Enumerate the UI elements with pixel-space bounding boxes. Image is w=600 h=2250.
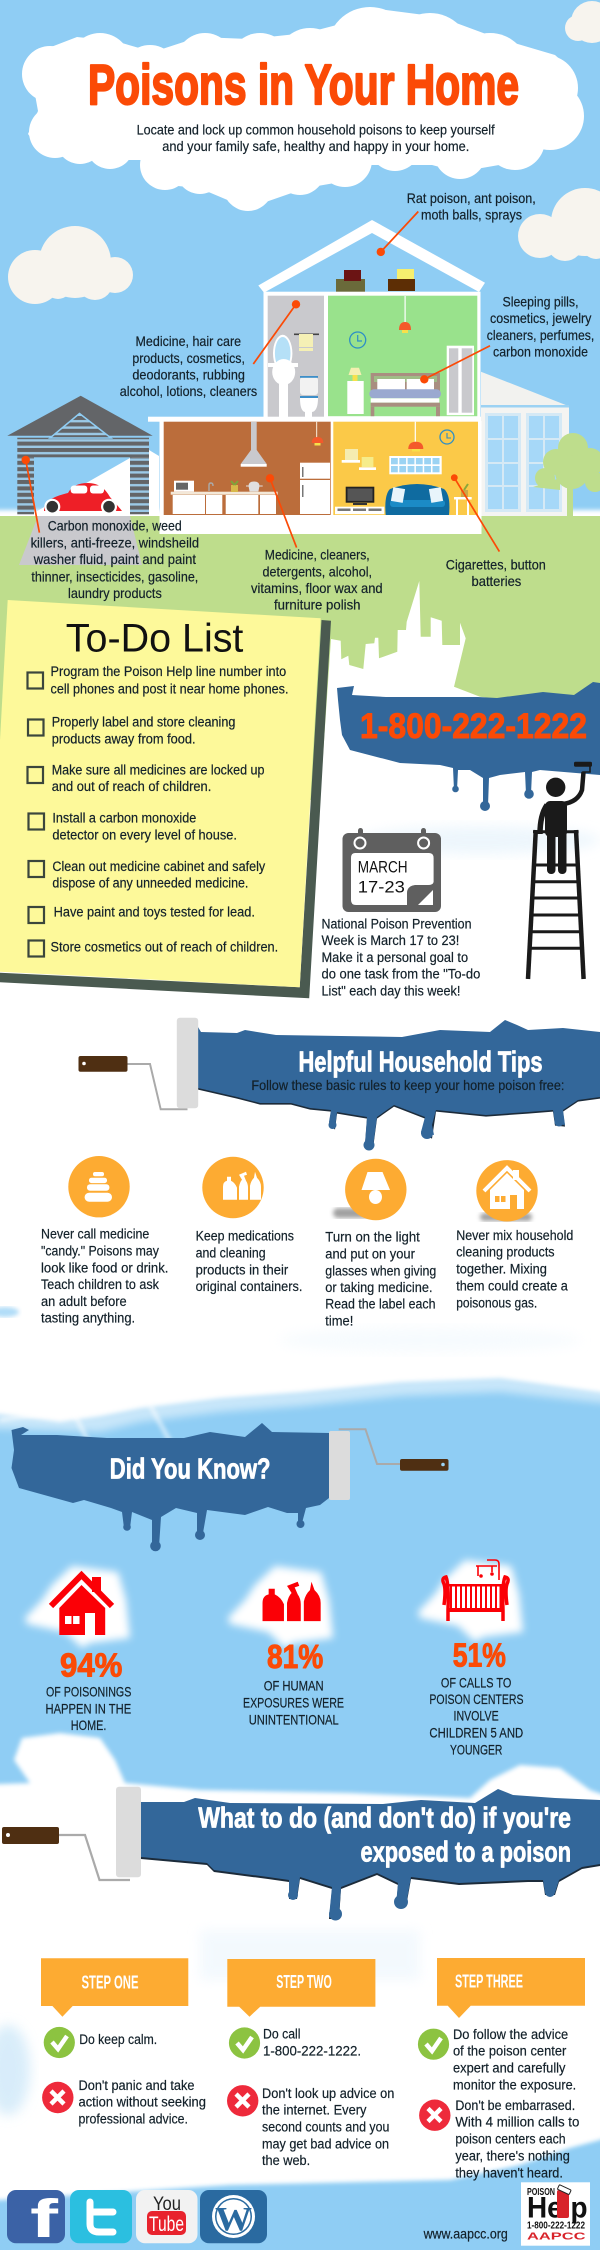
stat: 51%: POISON CENTERS: [429, 1691, 524, 1707]
callout: kitchen: [251, 546, 383, 613]
house cross-section: [148, 220, 485, 534]
callout: attic: moth balls, sprays: [421, 206, 522, 222]
step one column: Do keep calm.: [79, 2032, 157, 2047]
stat: 81%: 81%: [267, 1638, 323, 1675]
panel: to-do list note: [0, 600, 331, 998]
callout: bathroom: alcohol, lotions, cleaners: [120, 383, 257, 399]
callout: garage: washer fluid, paint and paint: [33, 551, 196, 567]
icon: calendar: MARCH: [358, 858, 408, 877]
stat: 51%: YOUNGER: [450, 1741, 502, 1757]
clouds: small decorative clouds: [8, 1, 600, 304]
tip 3 text: Turn on the light: [325, 1230, 420, 1245]
callout: garage: [31, 518, 199, 601]
callout lines and dots: [22, 212, 499, 552]
to-do items: detector on every level of house.: [52, 827, 237, 842]
step three column: STEP THREE: [455, 1972, 523, 1992]
tip icon: bottles: [202, 1157, 264, 1218]
tip 3 text: glasses when giving: [325, 1263, 436, 1278]
callout: garage: laundry products: [68, 585, 162, 601]
icon: facebook: f: [30, 2189, 60, 2249]
step header: [227, 1959, 375, 2017]
logo: poison help: Help: [527, 2191, 588, 2224]
to-do items: products away from food.: [52, 731, 196, 746]
icon: red crib: [443, 1560, 508, 1621]
to-do items: cell phones and post it near home phones.: [50, 681, 288, 696]
stat: 51%: 51%: [453, 1637, 506, 1674]
paint banner: helpful household tips: [198, 1020, 600, 1150]
checkboxes: [28, 672, 44, 956]
bedroom: [328, 296, 477, 416]
to-do items: and out of reach of children.: [52, 779, 211, 794]
stat: 94%: OF POISONINGS: [46, 1684, 131, 1700]
icon: calendar: [342, 828, 441, 912]
driveway: [19, 516, 142, 565]
stat: 94%: 94%: [60, 1647, 122, 1684]
attic boxes: [336, 269, 415, 292]
callout: bathroom: Medicine, hair care: [136, 333, 241, 349]
paint banner: what to do: [141, 1789, 600, 1920]
text: national poison prevention week: Week is March 17 to 23!: [322, 933, 459, 948]
callout: attic: Rat poison, ant poison,: [407, 190, 536, 206]
stat: 94%: HOME.: [71, 1717, 106, 1733]
step header: [437, 1958, 585, 2018]
callout: living room: [446, 556, 546, 589]
bathroom: [268, 296, 324, 417]
callout: attic: [407, 190, 536, 222]
stat: 51%: INVOLVE: [454, 1708, 499, 1724]
to-do items: dispose of any unneeded medicine.: [52, 876, 248, 891]
callout: living room: Cigarettes, button: [446, 556, 546, 572]
step one column: [41, 1958, 206, 2126]
tip icon: house: [476, 1160, 538, 1222]
step three column: [418, 1958, 585, 2180]
icon: check: [229, 2027, 260, 2059]
living room: [333, 422, 478, 515]
garage: [7, 396, 159, 516]
stat: 51%: CHILDREN 5 AND: [429, 1725, 523, 1741]
logo: poison help: AAPCC: [527, 2230, 586, 2242]
icon: facebook: [7, 2189, 65, 2249]
website url: www.aapcc.org: [423, 2225, 508, 2241]
icon: cross: [42, 2082, 74, 2113]
icon: calendar: 17-23: [358, 878, 405, 897]
callout: bedroom: carbon monoxide: [493, 344, 588, 360]
step three column: poison centers each: [455, 2132, 566, 2147]
icon: twitter: [70, 2190, 132, 2243]
text: national poison prevention week: Make it a personal goal to: [322, 950, 468, 965]
header cloud: [22, 7, 584, 211]
text: national poison prevention week: National Poison Prevention: [322, 916, 472, 931]
stat: 94%: HAPPEN IN THE: [46, 1700, 131, 1716]
callout: kitchen: detergents, alcohol,: [262, 564, 372, 580]
callout: garage: Carbon monoxide, weed: [48, 518, 182, 534]
icon: check: [44, 2027, 75, 2058]
step two column: may get bad advice on: [262, 2136, 389, 2151]
step three column: With 4 million calls to: [455, 2115, 579, 2130]
icon: wordpress: W: [215, 2201, 252, 2238]
icon: wordpress: [200, 2190, 267, 2243]
icon: youtube: Tube: [149, 2213, 184, 2236]
icon: red house: [51, 1575, 112, 1635]
to-do items: Store cosmetics out of reach of children.: [50, 940, 278, 955]
logo: poison help: POISON: [527, 2187, 555, 2198]
tip 1 text: an adult before: [41, 1294, 127, 1309]
step one column: Don't panic and take: [78, 2078, 194, 2093]
stat: 51%: OF CALLS TO: [441, 1674, 511, 1690]
callout: kitchen: furniture polish: [274, 597, 360, 613]
stat: 94%: [25, 1566, 131, 1733]
to-do items: Properly label and store cleaning: [52, 715, 235, 730]
icon: red bottles: [263, 1582, 321, 1621]
text: national poison prevention week: do one task from the "To-do: [322, 967, 480, 982]
step three column: year, there's nothing: [455, 2148, 570, 2163]
stat: 51%: [418, 1560, 524, 1757]
tip 1 text: tasting anything.: [41, 1311, 135, 1326]
tip icon: pills: [68, 1156, 532, 1221]
icon: painter on ladder: [528, 762, 592, 979]
tip 4 text: cleaning products: [456, 1245, 555, 1260]
heading: Did You Know?: [110, 1453, 270, 1485]
icon: youtube: [136, 2190, 198, 2243]
step three column: Don't be embarrased.: [455, 2098, 575, 2113]
to-do items: Install a carbon monoxide: [52, 811, 196, 826]
text: national poison prevention week: List" each day this week!: [322, 984, 460, 999]
tip 1 text: Never call medicine: [41, 1227, 149, 1242]
callout: garage: killers, anti-freeze, windsheild: [31, 535, 199, 551]
intro text: [137, 121, 495, 154]
callout: bathroom: deodorants, rubbing: [132, 367, 245, 383]
attic roof: [258, 220, 485, 293]
callout: garage: thinner, insecticides, gasoline,: [31, 568, 198, 584]
step one column: professional advice.: [78, 2111, 188, 2126]
callout: kitchen: Medicine, cleaners,: [265, 546, 370, 562]
callout: kitchen: vitamins, floor wax and: [251, 580, 383, 596]
paint banner: did you know: [12, 1423, 329, 1551]
intro text: Locate and lock up common household poisons to keep yourself: [137, 121, 495, 137]
paint band: phone number: [337, 682, 600, 811]
to-do heading: To-Do List: [66, 617, 243, 661]
step three column: they haven't heard.: [455, 2165, 563, 2180]
neighbouring house at right: [481, 372, 569, 516]
step two column: 1-800-222-1222.: [263, 2044, 361, 2059]
icon: paint roller what to do: [2, 1787, 141, 1880]
stat: 81%: EXPOSURES WERE: [243, 1694, 344, 1710]
text: national poison prevention week: [322, 916, 480, 999]
callout: bathroom: [120, 333, 257, 399]
step one column: STEP ONE: [82, 1972, 138, 1992]
tip 4 text: poisonous gas.: [456, 1295, 537, 1310]
intro text: and your family safe, healthy and happy in your home.: [162, 138, 469, 154]
callout: bedroom: Sleeping pills,: [502, 293, 578, 309]
icon: youtube: You: [153, 2194, 181, 2215]
tip 4 text: together. Mixing: [456, 1261, 547, 1276]
stat: 81%: [228, 1566, 344, 1727]
tree: [533, 433, 600, 517]
step header: [41, 1958, 188, 2017]
step three column: Do follow the advice: [453, 2027, 568, 2042]
tip 1 text: "candy." Poisons may: [41, 1243, 159, 1258]
tip icon: lamp: [345, 1159, 406, 1220]
to-do items: Clean out medicine cabinet and safely: [52, 859, 265, 874]
logo: poison help: [521, 2182, 590, 2246]
to-do items: [50, 664, 288, 955]
tip 2 text: and cleaning: [196, 1245, 266, 1260]
step two column: second counts and you: [262, 2120, 389, 2135]
tip 3 text: and put on your: [325, 1246, 415, 1261]
upper storey walls: [264, 292, 480, 422]
callout: bathroom: products, cosmetics,: [132, 350, 245, 366]
step three column: monitor the exposure.: [453, 2077, 576, 2092]
step one column: action without seeking: [78, 2095, 206, 2110]
step two column: the internet. Every: [262, 2103, 367, 2118]
tip 2 text: original containers.: [196, 1279, 302, 1294]
tip 3 text: time!: [325, 1313, 353, 1328]
callout: bedroom: [487, 293, 594, 360]
green ground and skyline: [0, 516, 600, 800]
icon: cross: [227, 2085, 258, 2116]
step three column: of the poison center: [453, 2044, 567, 2059]
tip 2 text: [196, 1229, 302, 1294]
icon: paint roller did you know: [329, 1429, 448, 1500]
tip 3 text: or taking medicine.: [325, 1280, 432, 1295]
to-do items: Program the Poison Help line number into: [50, 664, 286, 679]
icon: cross: [419, 2100, 450, 2131]
to-do items: Make sure all medicines are locked up: [52, 762, 265, 777]
tip 1 text: [41, 1227, 168, 1326]
tip 4 text: Never mix household: [456, 1228, 573, 1243]
tip 4 text: them could create a: [456, 1278, 568, 1293]
step two column: Do call: [263, 2026, 300, 2041]
icon: check: [418, 2029, 449, 2060]
kitchen: [164, 422, 331, 515]
to-do items: Have paint and toys tested for lead.: [54, 904, 255, 919]
callout: living room: batteries: [472, 573, 521, 589]
sub-heading: Follow these basic rules to keep your home poison free:: [251, 1077, 564, 1093]
stat: 81%: UNINTENTIONAL: [249, 1711, 339, 1727]
logo: poison help: 1-800-222-1222: [527, 2220, 585, 2231]
tip 4 text: [456, 1228, 573, 1310]
step two column: [227, 1959, 394, 2168]
stat: 81%: OF HUMAN: [264, 1678, 324, 1694]
icon: paint roller tips: [78, 1018, 198, 1109]
step two column: STEP TWO: [276, 1972, 332, 1992]
car: [44, 483, 122, 515]
step two column: the web.: [262, 2153, 310, 2168]
tip 3 text: [325, 1230, 436, 1328]
tip 2 text: products in their: [196, 1262, 289, 1277]
tip 2 text: Keep medications: [196, 1229, 294, 1244]
tip 3 text: Read the label each: [325, 1297, 436, 1312]
tip 1 text: Teach children to ask: [41, 1277, 159, 1292]
step three column: expert and carefully: [453, 2061, 566, 2076]
tip 1 text: look like food or drink.: [41, 1260, 168, 1275]
step two column: Don't look up advice on: [262, 2086, 394, 2101]
